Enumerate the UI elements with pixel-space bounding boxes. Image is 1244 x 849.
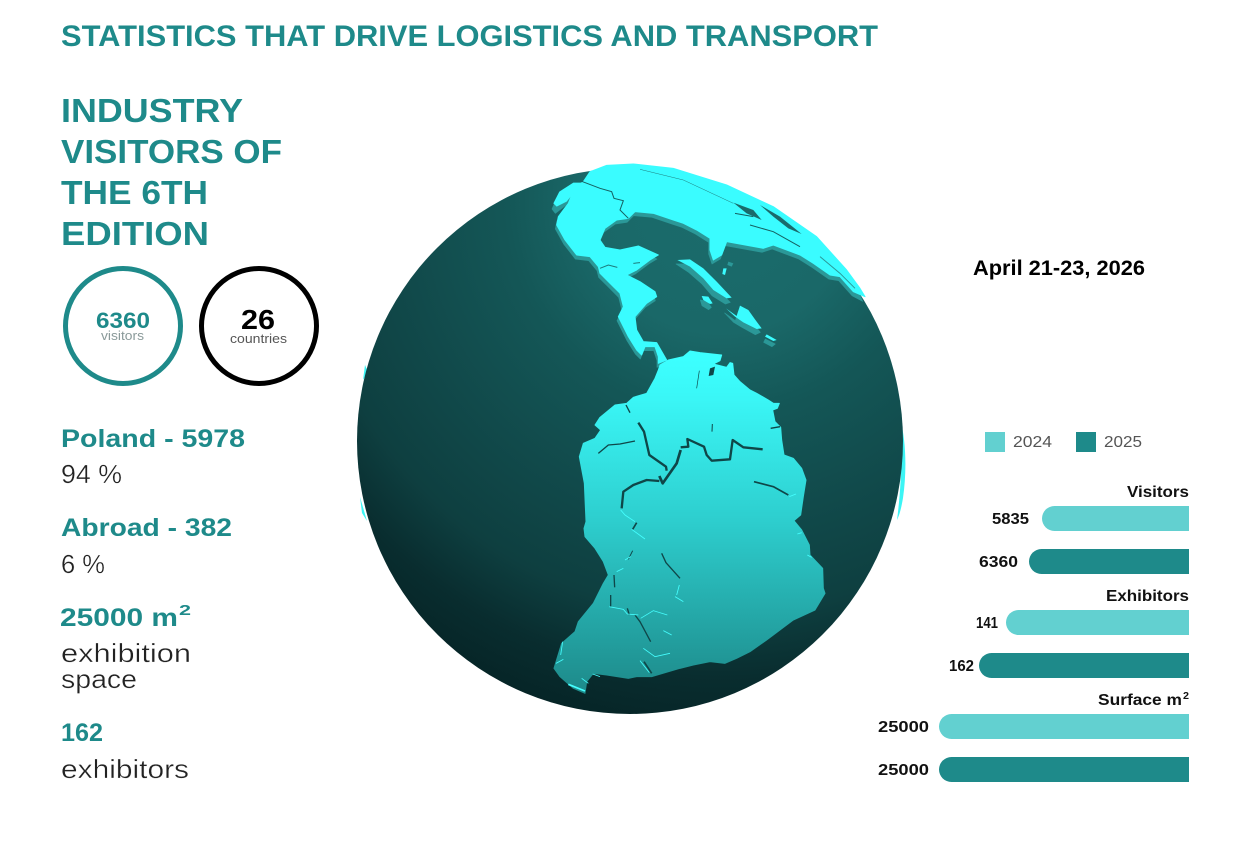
- South America rivers: [598, 371, 788, 673]
- stat circle: visitors: 6360: [96, 308, 150, 333]
- stat: Abroad: [61, 514, 232, 579]
- stat: exhibition space: 2: [179, 602, 191, 619]
- heading: industry visitors: THE 6TH: [61, 174, 208, 211]
- bar chart: exhibitors: 162: [949, 658, 974, 675]
- stat: exhibition space: [60, 602, 191, 694]
- heading: industry visitors: VISITORS OF: [61, 133, 282, 170]
- stat circle: countries: [202, 268, 316, 384]
- bar chart: surface: [878, 691, 1189, 782]
- legend: 2025: [1104, 434, 1142, 451]
- bar chart: exhibitors: [949, 588, 1189, 678]
- stat circle: visitors: [66, 268, 180, 384]
- stat: exhibitors: exhibitors: [61, 754, 189, 784]
- stat: exhibition space: 25000 m: [60, 604, 178, 632]
- South America highlights: [556, 494, 812, 691]
- bar chart: surface: 25000: [878, 762, 929, 779]
- South America landmass: [554, 351, 825, 693]
- bar chart: surface: 2: [1183, 691, 1189, 702]
- globe: [357, 164, 905, 714]
- bar chart: surface: Surface m: [1098, 692, 1182, 709]
- heading: industry visitors: EDITION: [61, 215, 209, 252]
- heading: industry visitors: INDUSTRY: [61, 92, 243, 129]
- bar chart: visitors: 6360: [979, 554, 1018, 571]
- bar chart: visitors: 5835: [992, 511, 1029, 528]
- legend: 2024: [1013, 434, 1052, 451]
- stat: Poland: Poland - 5978: [61, 425, 245, 453]
- stat: Abroad: Abroad - 382: [61, 514, 232, 542]
- continent: North America: [552, 164, 865, 367]
- stat: Poland: [61, 425, 245, 489]
- stat circle: visitors: visitors: [101, 328, 145, 343]
- title: STATISTICS THAT DRIVE LOGISTICS AND TRANSPORT: [61, 20, 878, 53]
- lake: [709, 367, 715, 376]
- date: April 21-23, 2026: [973, 257, 1145, 280]
- North America mainland: [557, 164, 865, 363]
- stat circle: countries: countries: [230, 331, 288, 346]
- stat circle: countries: 26: [241, 304, 275, 335]
- continent: South America: [554, 351, 825, 693]
- stat: exhibition space: exhibition: [61, 638, 191, 668]
- stat: exhibition space: space: [61, 664, 137, 694]
- bar chart: visitors: [979, 484, 1189, 574]
- ocean sphere: [357, 168, 903, 714]
- heading: industry visitors: [61, 92, 282, 252]
- stat: exhibitors: [61, 719, 189, 784]
- North America extrusion: [552, 169, 863, 367]
- stat: Poland: 94 %: [61, 459, 122, 489]
- legend: [985, 432, 1142, 452]
- bar chart: exhibitors: 141: [976, 615, 998, 632]
- bar chart: exhibitors: Exhibitors: [1106, 588, 1189, 605]
- bar chart: surface: 25000: [878, 719, 929, 736]
- North America rivers and lakes: [580, 169, 855, 288]
- stat: exhibitors: 162: [61, 719, 103, 747]
- globe edge slivers: [360, 365, 905, 521]
- Caribbean islands and Baja: [553, 183, 777, 341]
- stat: Abroad: 6 %: [61, 549, 105, 579]
- bar chart: visitors: Visitors: [1127, 484, 1189, 501]
